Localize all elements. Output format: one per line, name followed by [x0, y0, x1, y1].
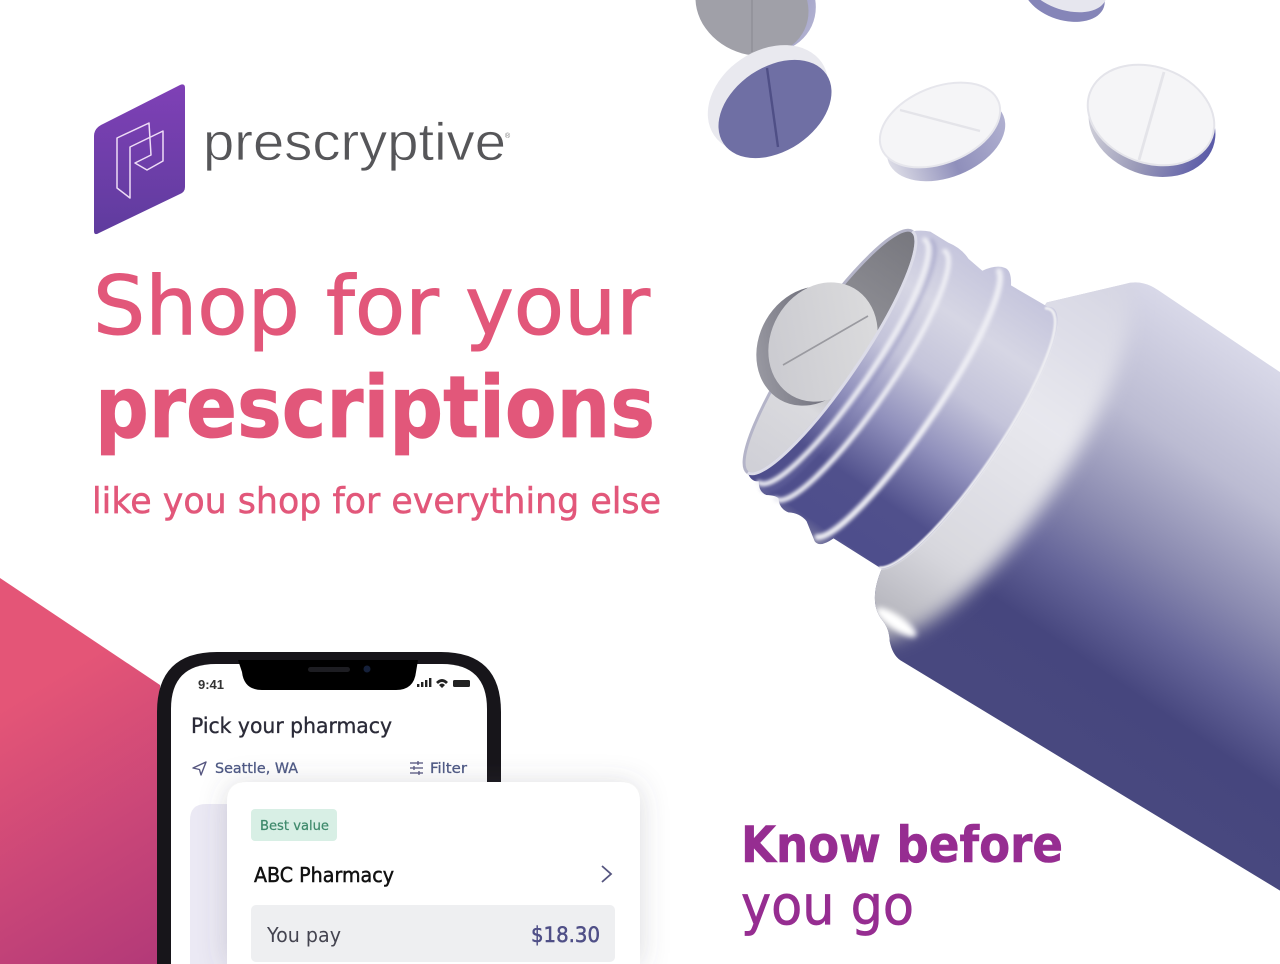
logo wordmark: prescryptive	[203, 113, 506, 172]
location arrow icon	[193, 762, 206, 775]
phone mockup	[157, 652, 501, 964]
tagline	[741, 816, 1063, 937]
filter text: Filter	[430, 761, 467, 777]
best value badge: Best value	[260, 818, 329, 834]
subheading: like you shop for everything else	[92, 481, 661, 522]
pill white right	[1074, 48, 1230, 194]
location text: Seattle, WA	[215, 761, 298, 777]
headline line 1: Shop for your	[93, 260, 651, 354]
status icons	[417, 678, 470, 688]
pink corner shape	[0, 578, 160, 964]
pill top left	[679, 0, 833, 74]
chevron icon	[602, 866, 611, 882]
tagline regular: you go	[741, 874, 914, 937]
neck thread highlights	[752, 227, 1081, 593]
background pharmacy card	[190, 804, 310, 964]
best value badge	[251, 809, 337, 841]
registered mark: ®	[505, 132, 511, 140]
price row: $18.30	[531, 923, 600, 947]
headline line 2: prescriptions	[95, 358, 655, 458]
status time: 9:41	[198, 677, 224, 692]
phone screen	[171, 664, 487, 964]
bottle opening interior	[723, 214, 937, 490]
bottle neck	[737, 213, 1085, 598]
logo	[94, 84, 511, 234]
bottle rim	[748, 231, 937, 490]
headline	[92, 260, 661, 522]
pharmacy name: ABC Pharmacy	[254, 863, 394, 887]
card background	[227, 782, 640, 964]
screen title: Pick your pharmacy	[191, 714, 392, 738]
phone notch	[238, 660, 418, 690]
bottle shoulder highlight	[875, 285, 1127, 651]
price row	[251, 905, 615, 962]
pill indigo face	[687, 23, 850, 178]
pharmacy card	[227, 782, 640, 964]
speaker and camera	[308, 666, 370, 672]
bottle body	[834, 241, 1280, 914]
pill in bottle mouth	[735, 262, 899, 426]
logo mark	[94, 84, 185, 234]
pill white diagonal score	[867, 66, 1018, 197]
falling pills	[679, 0, 1230, 197]
bottle body and neck	[747, 230, 1280, 891]
pill bottle	[742, 228, 1280, 891]
pill top edge	[1016, 0, 1113, 32]
filter icon	[410, 761, 423, 775]
price row: You pay	[266, 923, 341, 947]
tagline bold: Know before	[741, 816, 1063, 874]
phone frame	[157, 652, 501, 964]
